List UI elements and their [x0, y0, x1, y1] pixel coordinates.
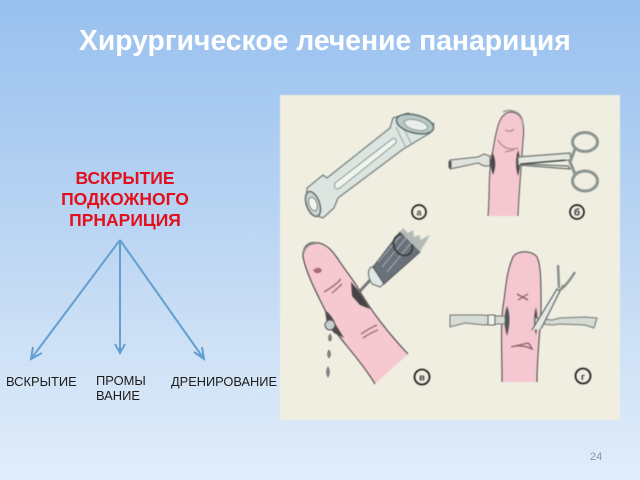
- illustration c: finger with syringe: [303, 228, 430, 384]
- heading: red diagram heading: ВСКРЫТИЕ: [75, 168, 175, 188]
- page number: 24: [590, 451, 602, 463]
- label d: [576, 368, 590, 384]
- label c: в: [419, 372, 425, 384]
- heading: red diagram heading: [61, 168, 189, 230]
- title: Хирургическое лечение панариция: [79, 24, 571, 56]
- illustration d: finger with drain and clamps: [450, 252, 597, 382]
- label a: [412, 205, 426, 219]
- panel: surgical illustrations: [280, 94, 620, 420]
- label b: [570, 205, 584, 219]
- heading: red diagram heading: ПОДКОЖНОГО: [61, 189, 189, 209]
- label: washing: ПРОМЫ: [96, 373, 146, 388]
- label c: [414, 370, 430, 384]
- label: drainage: ДРЕНИРОВАНИЕ: [171, 374, 277, 389]
- illustration b: finger with forceps: [450, 110, 598, 216]
- heading: red diagram heading: ПРНАРИЦИЯ: [69, 210, 181, 230]
- label: washing: [96, 373, 146, 402]
- label: washing: ВАНИЕ: [96, 388, 140, 402]
- label d: г: [581, 372, 585, 383]
- illustration a: tube instrument: [302, 111, 436, 218]
- label b: б: [574, 206, 580, 218]
- label a: а: [416, 208, 422, 218]
- label: opening: ВСКРЫТИЕ: [6, 374, 77, 389]
